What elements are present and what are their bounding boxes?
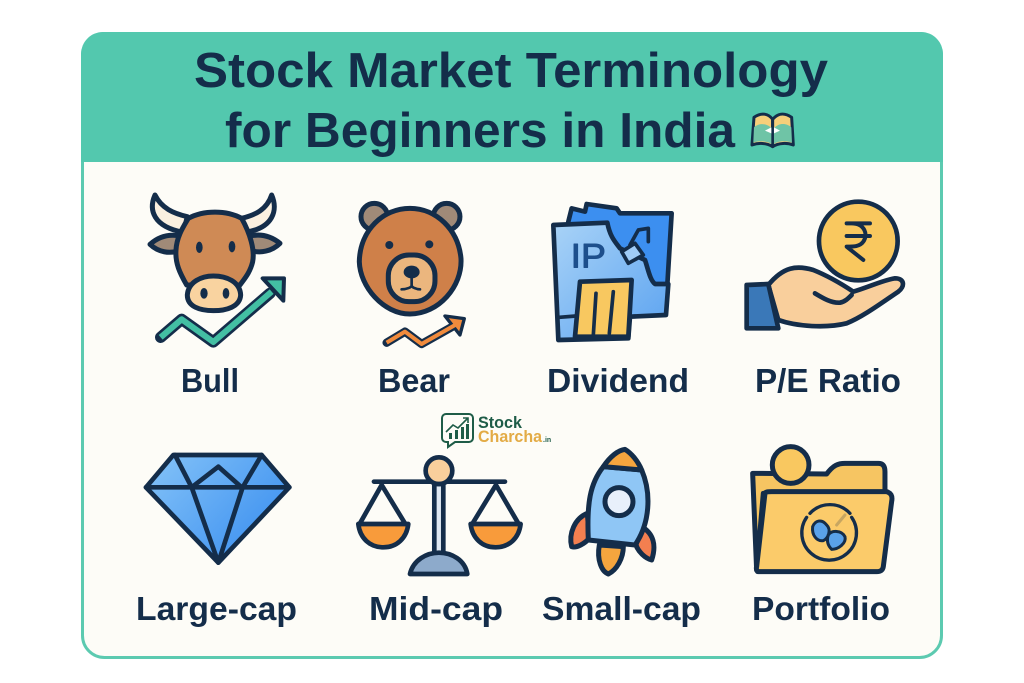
label: Dividend: Dividend [547,362,689,399]
logo: StockCharcha.in [442,413,551,447]
icon: bear [359,203,464,344]
title [194,44,828,158]
label: Bear: Bear [378,362,450,399]
title: Stock Market Terminology [194,44,828,98]
label: Small-cap: Small-cap [542,590,701,627]
label: Bull: Bull [181,362,239,399]
icon: open book [752,114,793,147]
icon: diamond [146,455,289,563]
icon: portfolio folder [753,447,892,572]
icon: hand with rupee coin [747,202,903,328]
title: for Beginners in India [225,104,736,158]
label: P/E Ratio: P/E Ratio [755,362,901,399]
icon: balance scale [358,457,521,574]
header band [81,32,943,162]
panel: card [81,32,943,658]
icon: rocket [571,449,654,574]
logo: StockCharcha.in: Stock [478,413,523,432]
label: Large-cap: Large-cap [136,590,297,627]
icon: dividend document [553,204,672,340]
logo: StockCharcha.in: Charcha [478,427,543,446]
label: Mid-cap: Mid-cap [369,590,503,627]
icon: bull [150,195,284,342]
icon: dividend document: IP [571,237,606,275]
label: Portfolio: Portfolio [752,590,890,627]
logo: StockCharcha.in: .in [543,437,551,444]
